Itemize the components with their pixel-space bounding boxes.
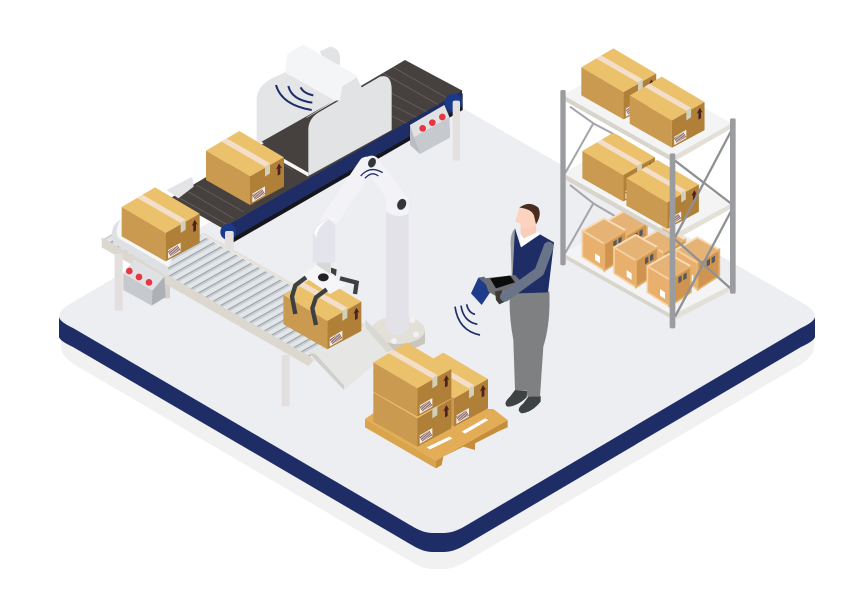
gripped box [283,275,361,349]
curved guard face [112,220,168,277]
conveyor near leg [225,231,234,251]
ramp [309,319,394,390]
belt black underside [227,93,463,243]
gripper plate [302,265,346,294]
scanner device [471,275,521,305]
upper pallet box [373,343,451,417]
roller conveyor [102,209,367,406]
collar [520,231,540,247]
forearm sleeve [505,247,549,297]
curved guard, first box and left control box [112,177,200,306]
roller surface [102,209,363,357]
robot gripper [292,265,357,325]
crates on bottom shelf [582,211,719,306]
boxes on top shelf [581,48,705,148]
belt navy side [222,90,463,241]
shelf levels surfaces [563,62,732,319]
back finger [331,268,337,276]
left fingers [292,277,327,325]
rear pallet box [410,353,488,427]
platform top surface [59,94,815,533]
robot column [386,210,409,335]
tunnel front panel [308,76,392,176]
robot base, ramp and column [309,210,425,390]
pallet [365,408,508,468]
storage shelf with boxes and crates [560,48,736,328]
right control box [410,105,450,154]
belt stripes [180,67,448,224]
tunnel dark opening [262,101,334,168]
gripper neck [318,273,329,281]
worker upper body and scanner [471,204,554,305]
roller far leg [164,282,170,298]
boxes on middle shelf [582,133,699,229]
guard back lip [167,177,194,198]
shoes [506,390,541,413]
trousers [510,292,550,397]
pallet with boxes [365,343,508,468]
left control box [123,259,166,306]
elbow and wrist [313,218,335,264]
upper arm [328,165,367,222]
floor platform [59,94,815,569]
robot arm [313,157,409,273]
shelf front edges [563,95,672,319]
roller upper rail [200,233,367,327]
back sleeve [511,228,517,275]
tunnel top hump [285,44,358,101]
neck [521,222,537,238]
shelf posts [560,90,736,328]
column cap [386,197,409,216]
roller legs [115,253,290,406]
conveyor right leg [453,101,460,161]
right finger [340,278,357,294]
wireless waves on tunnel [276,85,313,110]
shoulder joint [395,197,408,211]
rear braces [565,107,622,253]
platform navy edge [59,317,815,552]
top joint [367,157,377,169]
tunnel white floor strip [282,158,308,177]
worker lower body [455,292,550,413]
belt conveyor with scanner tunnel [170,44,463,251]
belt end rollers [220,94,462,240]
navy vest [512,228,554,294]
tunnel rear tab [320,47,340,65]
roller side rail [102,237,314,366]
platform shadow [61,335,814,569]
wireless waves on arm [361,170,383,178]
box on belt [206,131,284,205]
curved guard top [113,215,175,268]
forearm to shoulder [372,164,401,203]
robot base disc [372,316,425,351]
face [515,208,536,229]
elbow highlight [314,218,338,237]
belt surface [170,60,462,228]
first box [122,187,200,261]
tunnel back panel [257,72,335,143]
scanner waves [455,304,480,335]
wrist collar [317,263,331,273]
hair [519,204,540,224]
lower pallet box [373,373,451,447]
front braces [675,130,732,317]
